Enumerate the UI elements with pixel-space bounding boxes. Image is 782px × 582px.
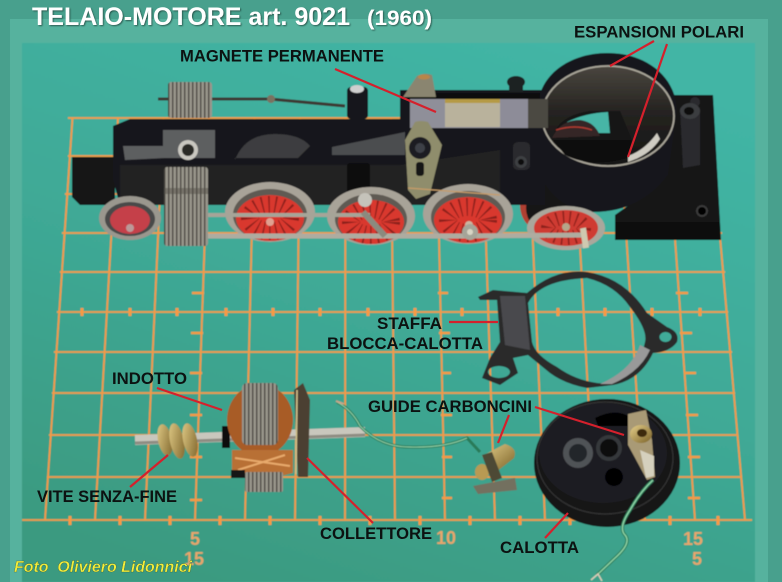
commutator xyxy=(294,383,310,477)
armature xyxy=(135,383,365,492)
title: TELAIO-MOTORE art. 9021 xyxy=(32,3,350,31)
right plate xyxy=(615,95,721,240)
magnet ring xyxy=(538,53,677,212)
part labels: INDOTTO xyxy=(112,370,187,388)
ruler numbers: 10 xyxy=(436,528,456,548)
part labels: MAGNETE PERMANENTE xyxy=(180,48,384,66)
calotta cover xyxy=(534,399,680,581)
wheel 5 xyxy=(527,206,605,250)
title: (1960) xyxy=(367,7,432,30)
ruler numbers: 5 xyxy=(190,529,200,549)
brush plate xyxy=(628,410,655,480)
front coil xyxy=(164,167,208,246)
part labels: CALOTTA xyxy=(500,539,579,557)
copper windings xyxy=(227,384,293,456)
top coil xyxy=(168,82,212,118)
main frame xyxy=(113,90,545,205)
brush guide xyxy=(473,444,517,494)
part labels: STAFFA xyxy=(377,315,442,333)
small wheel 1 xyxy=(99,196,161,240)
pivot bracket xyxy=(405,121,442,199)
right post xyxy=(680,108,700,168)
posts xyxy=(347,87,368,119)
rear wheel behind body xyxy=(520,179,564,231)
worm screw xyxy=(155,422,200,460)
photo credit: Foto Oliviero Lidonnici xyxy=(14,559,193,576)
wheel 3 xyxy=(327,187,415,245)
ruler numbers: 15 xyxy=(683,529,703,549)
magnet strip xyxy=(410,99,545,128)
part labels: COLLETTORE xyxy=(320,525,432,543)
locomotive chassis xyxy=(72,53,721,250)
green lead wire xyxy=(597,480,653,575)
top spring rod xyxy=(158,99,345,106)
part labels: ESPANSIONI POLARI xyxy=(574,24,744,42)
staffa bracket xyxy=(478,271,678,388)
wheel 4 xyxy=(423,184,513,244)
rear block xyxy=(72,157,115,205)
bearing bush xyxy=(178,140,198,160)
ruler numbers xyxy=(184,528,703,569)
ruler numbers: 15 xyxy=(184,549,204,569)
wheel 2 xyxy=(225,182,315,242)
guide wire xyxy=(336,401,480,452)
part labels: BLOCCA-CALOTTA xyxy=(327,335,483,353)
part labels: GUIDE CARBONCINI xyxy=(368,398,532,416)
part labels: VITE SENZA-FINE xyxy=(37,488,177,506)
red pointer lines xyxy=(130,41,667,538)
ruler numbers: 5 xyxy=(692,549,702,569)
connecting rods xyxy=(207,213,370,217)
